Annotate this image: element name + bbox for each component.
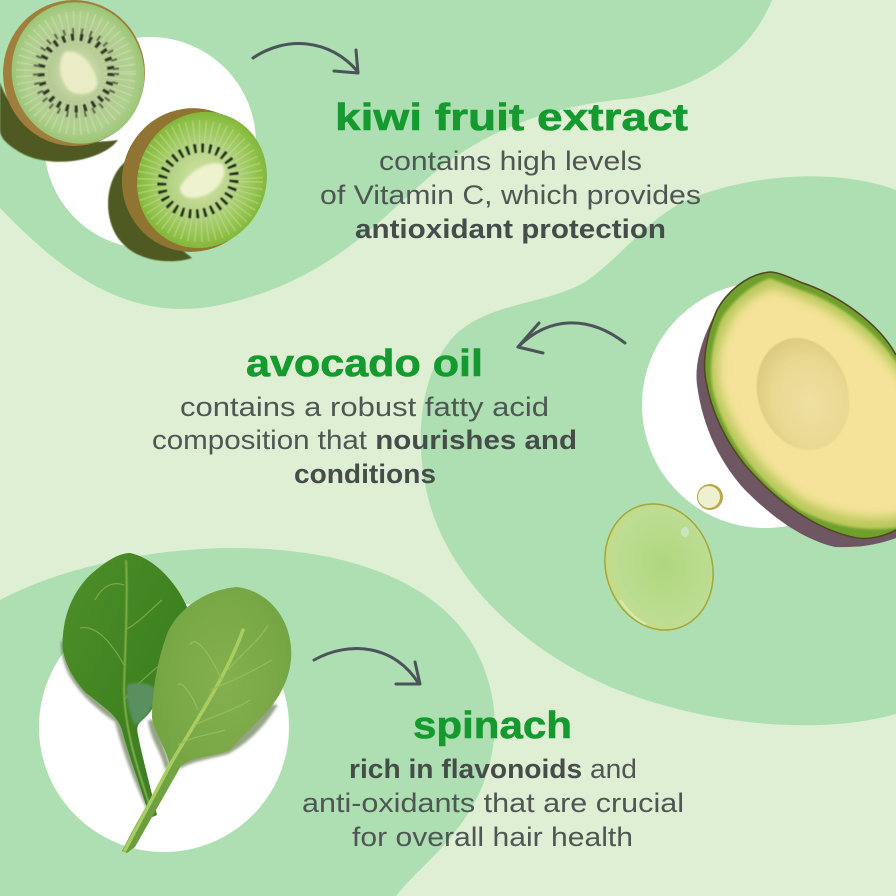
body line 2: composition that nourishes and <box>152 425 577 455</box>
spinach leaf shadows <box>61 640 278 812</box>
heading: avocado oil: avocado oil <box>246 343 483 385</box>
kiwi shadows <box>0 82 192 261</box>
body line 3 bold: conditions <box>294 459 436 489</box>
text block: spinach <box>302 705 684 852</box>
panel: spinach image <box>39 553 291 853</box>
arrow: to spinach text <box>314 649 420 684</box>
body line 3 bold: antioxidant protection <box>355 214 666 244</box>
body line 1: rich in flavonoids and <box>349 754 637 784</box>
text block: avocado oil <box>152 343 577 489</box>
avocado edge <box>705 272 896 539</box>
body line 3: for overall hair health <box>352 822 633 852</box>
spinach leaf: light <box>122 587 291 853</box>
background blob: avocado section <box>421 176 896 725</box>
background blob: kiwi section <box>0 0 772 309</box>
kiwi half: bottom right <box>106 90 289 270</box>
kiwi half: top left <box>0 0 160 159</box>
background blob: spinach section <box>0 548 495 896</box>
small oil droplet <box>697 484 723 510</box>
white circle behind kiwi <box>44 37 256 249</box>
body line 2: anti-oxidants that are crucial <box>302 788 684 818</box>
kiwi core <box>60 51 97 94</box>
arrow: to avocado text <box>518 323 625 353</box>
kiwi core <box>180 163 224 198</box>
panel: avocado image <box>589 265 896 644</box>
text block: kiwi fruit extract <box>320 97 701 244</box>
arrow: to kiwi text <box>253 44 358 73</box>
white circle behind spinach <box>39 602 289 852</box>
body line 2: of Vitamin C, which provides <box>320 180 701 210</box>
panel: kiwi image <box>0 0 289 270</box>
large oil droplet <box>589 490 729 644</box>
body line 1: contains high levels <box>379 146 642 176</box>
spinach leaf: dark <box>62 553 187 818</box>
heading: kiwi fruit extract: kiwi fruit extract <box>335 97 688 139</box>
heading: spinach: spinach <box>413 705 572 747</box>
avocado pit <box>743 326 863 462</box>
avocado shadow <box>696 312 896 547</box>
white circle behind avocado <box>642 282 888 528</box>
body line 1: contains a robust fatty acid <box>180 392 549 422</box>
avocado half flesh <box>705 272 896 538</box>
